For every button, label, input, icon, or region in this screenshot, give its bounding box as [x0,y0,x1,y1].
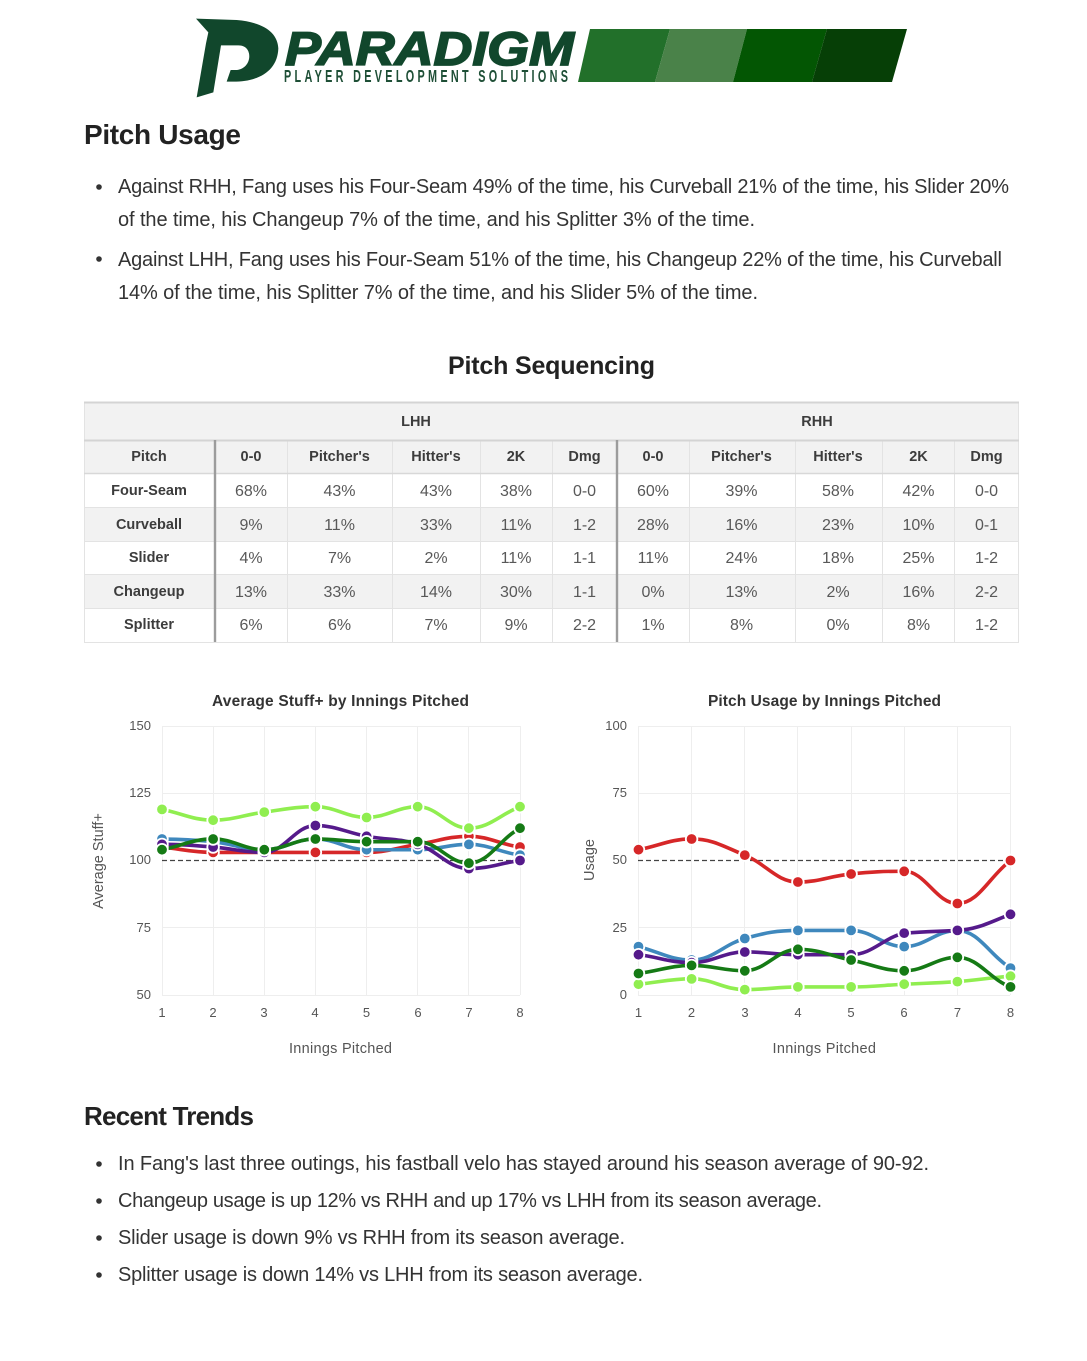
chart: Average Stuff+ by Innings Pitched [91,693,526,1057]
x axis ticks: 7 [954,1005,961,1020]
table row: Splitter: 0% [826,617,850,634]
table row: Slider: 24% [725,550,758,567]
table header: Pitch [131,449,167,465]
table header: LHH [401,414,431,430]
x axis ticks: 8 [516,1005,524,1020]
table row: Slider: 4% [239,550,263,567]
table row: Splitter: 1% [641,617,665,634]
table header: 0-0 [241,449,261,465]
table row: Slider: 1-1 [573,550,596,567]
table row: Four-Seam: 42% [902,483,935,500]
text block: pitch usage bullets: 14% of the time, his Splitter 7% of the time, and his Slider 5% of the time. [118,282,758,304]
table row: Changeup: 1-1 [573,584,596,601]
table row: Four-Seam: 0-0 [975,483,998,500]
table row: Slider: 1-2 [975,550,998,567]
text block: recent trends bullets: Changeup usage is up 12% vs RHH and up 17% vs LHH from its season average. [118,1190,822,1212]
x axis ticks [635,1005,1014,1020]
x axis ticks: 6 [900,1005,908,1020]
x axis title: Innings Pitched [289,1041,392,1057]
table row: Four-Seam: Four-Seam [111,483,187,499]
y axis ticks: 125 [129,785,151,800]
text block: recent trends bullets [96,1153,929,1286]
y axis ticks: 100 [605,718,627,733]
text block: pitch usage bullets: of the time, his Changeup 7% of the time, and his Splitter 3% of the time. [118,209,755,231]
logo green stripe [578,29,907,82]
table row: Splitter [124,617,998,634]
table row: Curveball: 9% [239,517,263,534]
y axis title: Usage [582,839,598,881]
table row: Curveball: 1-2 [573,517,596,534]
table row: Splitter: 9% [504,617,528,634]
text block: recent trends bullets: Splitter usage is down 14% vs LHH from its season average. [118,1264,643,1286]
table row: Curveball: 33% [420,517,452,534]
table row: Curveball: 28% [637,517,669,534]
table header: Dmg [970,449,1003,465]
table row: Splitter: 6% [239,617,263,634]
table header: 2K [909,449,928,465]
table row: Slider: 11% [501,550,531,567]
x axis ticks [158,1005,524,1020]
table row: Splitter: 8% [730,617,753,634]
y axis ticks: 25 [613,920,627,935]
table row: Changeup: 16% [902,584,935,601]
table row: Slider: 11% [638,550,668,567]
table row: Splitter: 1-2 [975,617,998,634]
x axis ticks: 6 [414,1005,422,1020]
chart: Pitch Usage by Innings Pitched [582,693,1016,1057]
text block: pitch usage bullets [96,176,1009,304]
line series [162,807,520,869]
table row: Splitter: 2-2 [573,617,596,634]
table header [131,414,1003,465]
table row: Four-Seam: 0-0 [573,483,596,500]
table row: Changeup: 13% [725,584,758,601]
heading: Pitch Sequencing: Pitch Sequencing [448,352,655,380]
y axis ticks: 50 [613,852,627,867]
table row: Changeup: 30% [500,584,532,601]
table header: Hitter's [411,449,461,465]
y axis ticks [605,718,627,1002]
table header: Hitter's [813,449,863,465]
table row: Curveball: 11% [324,517,355,534]
table row: Slider: Slider [129,550,170,566]
table row: Four-Seam: 39% [725,483,758,500]
x axis ticks: 1 [158,1005,166,1020]
table row: Four-Seam: 38% [500,483,532,500]
table row: Four-Seam [111,483,998,500]
text block: recent trends bullets: In Fang's last three outings, his fastball velo has stayed around his season average of 90-92. [118,1153,929,1175]
table row: Curveball: 0-1 [975,517,998,534]
y axis ticks: 150 [129,718,151,733]
x axis ticks: 4 [794,1005,802,1020]
table row: Slider: 2% [424,550,448,567]
data points [156,801,526,874]
x axis ticks: 5 [363,1005,370,1020]
table header: 2K [507,449,526,465]
table row: Splitter: 6% [328,617,351,634]
heading: Pitch Usage: Pitch Usage [84,119,241,150]
x axis ticks: 8 [1007,1005,1014,1020]
y axis title: Average Stuff+ [91,813,107,909]
y axis ticks: 75 [137,920,151,935]
table row: Curveball: 23% [822,517,854,534]
data points [633,833,1016,995]
y axis ticks: 50 [137,987,151,1002]
table row: Changeup: Changeup [114,584,185,600]
x axis ticks: 7 [465,1005,473,1020]
table row: Four-Seam: 60% [637,483,669,500]
table row: Slider: 7% [328,550,351,567]
x axis ticks: 3 [741,1005,749,1020]
table row: Changeup: 14% [420,584,452,601]
table row: Four-Seam: 68% [235,483,267,500]
logo wordmark: PARADIGM [285,22,575,75]
table header: Pitcher's [711,449,772,465]
table row: Changeup: 13% [235,584,267,601]
table row: Curveball: 16% [725,517,758,534]
x axis ticks: 1 [635,1005,642,1020]
table header: 0-0 [643,449,663,465]
table row: Splitter: Splitter [124,617,174,633]
table row: Splitter: 7% [424,617,448,634]
table row: Slider: 25% [902,550,935,567]
x axis ticks: 2 [209,1005,217,1020]
table row: Four-Seam: 58% [822,483,854,500]
table row: Curveball: 10% [902,517,935,534]
table row: Changeup [114,584,998,601]
text block: recent trends bullets: Slider usage is down 9% vs RHH from its season average. [118,1227,625,1249]
x axis title: Innings Pitched [772,1041,876,1057]
table header: RHH [801,414,833,430]
table: pitch sequencing [84,402,1019,642]
logo [196,19,907,97]
text block: pitch usage bullets: Against RHH, Fang uses his Four-Seam 49% of the time, his Curveball 21% of the time, his Slider 20% [118,176,1009,198]
y axis ticks: 0 [620,987,627,1002]
y axis ticks: 100 [129,852,151,867]
table row: Changeup: 33% [323,584,356,601]
icon: P mark [196,19,278,97]
table row: Splitter: 8% [907,617,930,634]
table header: Pitcher's [309,449,370,465]
table row: Slider: 18% [822,550,854,567]
y axis ticks: 75 [613,785,627,800]
table row: Curveball: 11% [501,517,531,534]
table row: Slider [129,550,998,567]
table row: Curveball [116,517,998,534]
line series [638,839,1010,990]
y axis ticks [129,718,151,1002]
table row: Four-Seam: 43% [323,483,356,500]
chart title: Average Stuff+ by Innings Pitched [212,693,469,710]
table header: Dmg [568,449,601,465]
x axis ticks: 4 [311,1005,319,1020]
x axis ticks: 2 [688,1005,695,1020]
chart title: Pitch Usage by Innings Pitched [708,693,941,710]
table row: Changeup: 2% [826,584,850,601]
heading: Recent Trends: Recent Trends [84,1101,254,1131]
table row: Changeup: 2-2 [975,584,998,601]
text block: pitch usage bullets: Against LHH, Fang uses his Four-Seam 51% of the time, his Changeup 22% of the time, his Curveball [118,249,1002,271]
logo tagline: PLAYER DEVELOPMENT SOLUTIONS [284,68,568,87]
table row: Changeup: 0% [641,584,665,601]
table row: Four-Seam: 43% [420,483,452,500]
x axis ticks: 5 [847,1005,855,1020]
table row: Curveball: Curveball [116,517,182,533]
x axis ticks: 3 [260,1005,268,1020]
